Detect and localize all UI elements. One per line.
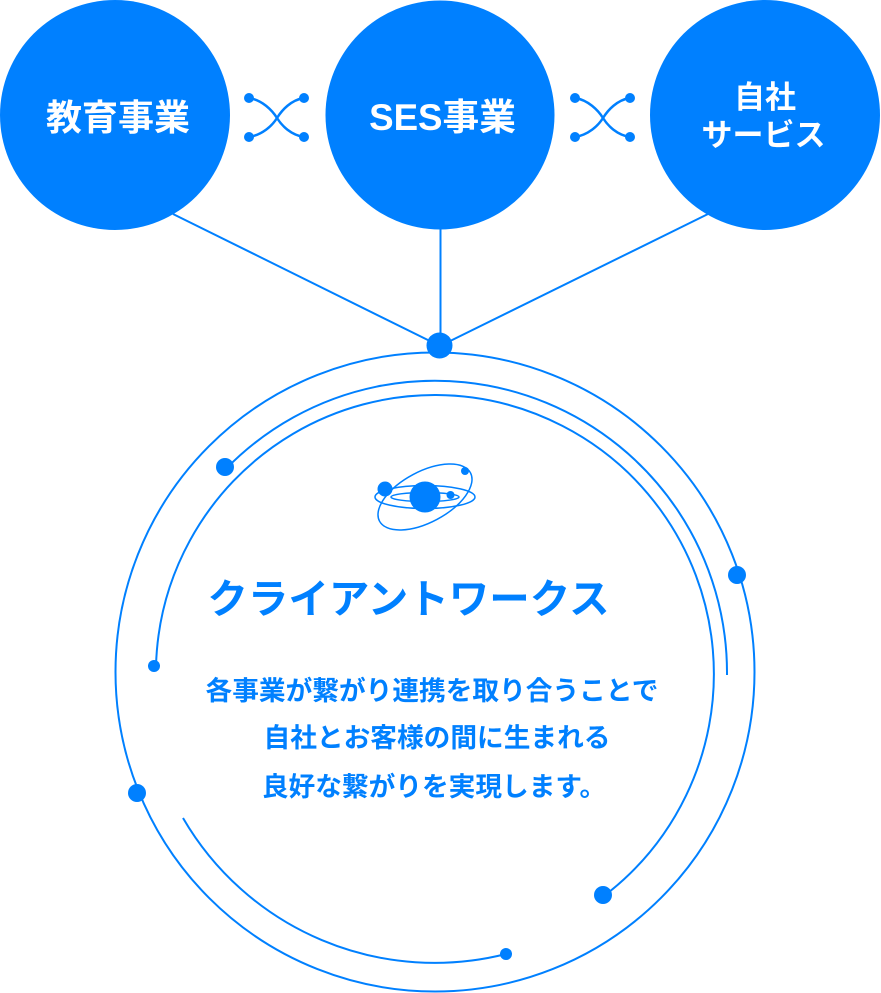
description text: 良好な繋がりを実現します。 [262, 772, 606, 802]
heading: client works: クライアントワークス [207, 576, 610, 622]
description text [206, 676, 658, 802]
icon: link between SES and own services [570, 93, 635, 142]
circle: own services: 自社 [734, 80, 796, 115]
circle: SES business [326, 0, 554, 230]
circle: education business [0, 0, 230, 230]
circle: education business: 教育事業 [46, 97, 190, 138]
description text: 各事業が繋がり連携を取り合うことで [206, 676, 658, 706]
icon: planet system [368, 450, 482, 544]
client works orbit rings [116, 332, 754, 992]
circle: own services: サービス [702, 118, 826, 153]
circle: own services [650, 0, 880, 230]
circle: SES business: SES事業 [369, 97, 516, 138]
icon: link between education and SES [244, 93, 309, 142]
description text: 自社とお客様の間に生まれる [264, 723, 610, 753]
connector lines to client circle [173, 214, 708, 346]
